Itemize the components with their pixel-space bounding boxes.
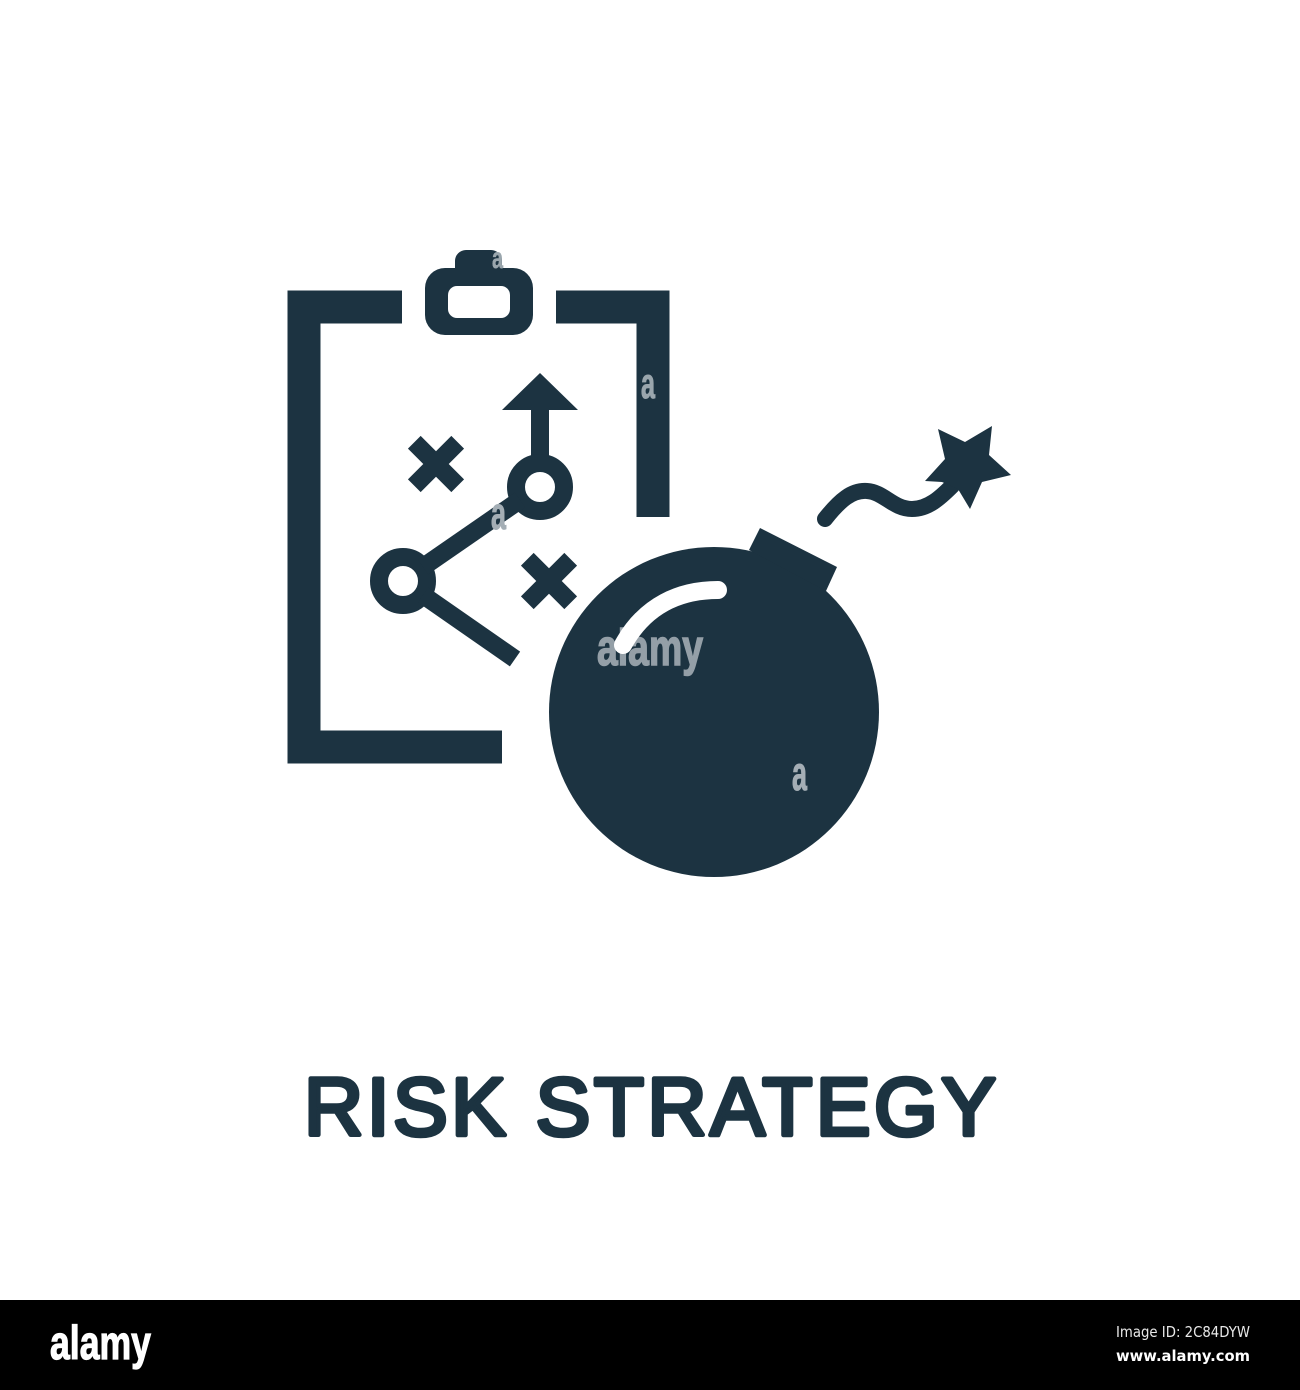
- title: RISK STRATEGY: [304, 1062, 996, 1153]
- icon: bomb: [549, 426, 1011, 877]
- icon: strategy play diagram: [379, 373, 578, 659]
- icon: clipboard: [304, 250, 653, 747]
- footer image id: Image ID: 2C84DYW: [1116, 1323, 1250, 1341]
- icon: bomb highlight: [623, 590, 718, 645]
- watermark: small a on line: a: [491, 488, 507, 539]
- watermark: small a lower: a: [792, 748, 807, 801]
- watermark: alamy centre: alamy: [597, 619, 703, 676]
- footer logo: alamy: [50, 1316, 151, 1369]
- footer url: www.alamy.com: [1116, 1347, 1250, 1365]
- watermark: small a upper: a: [641, 360, 656, 408]
- footer bar: [0, 1300, 1300, 1390]
- watermark: small a on clip: a: [492, 242, 503, 275]
